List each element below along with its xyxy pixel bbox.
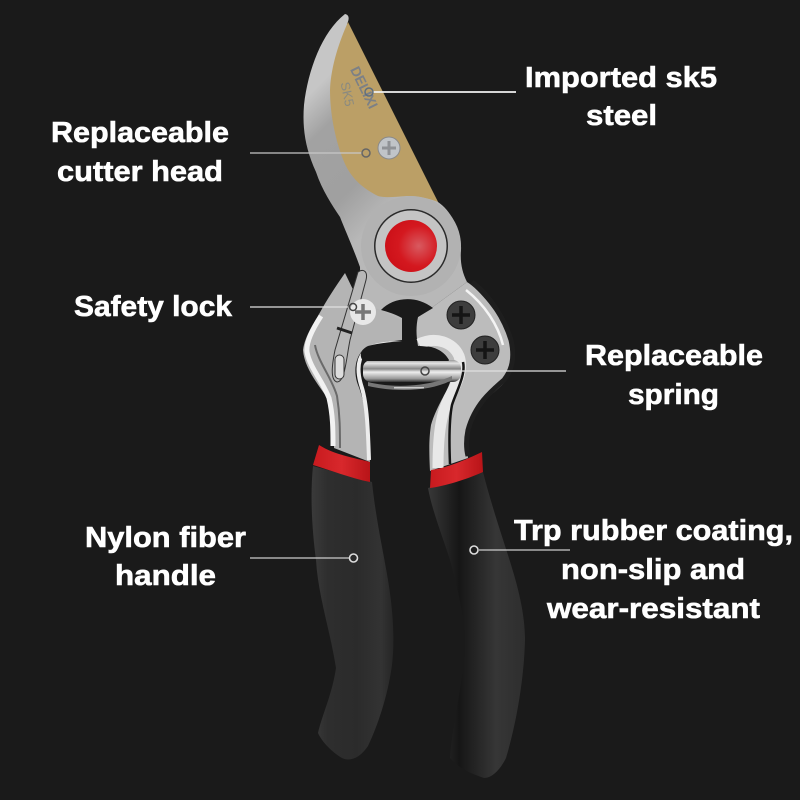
gold cutting edge (330, 22, 438, 202)
pivot hub (361, 196, 461, 296)
label: imported sk5 steel (525, 62, 717, 132)
label: replaceable spring (585, 340, 763, 411)
label: imported sk5 steel: Imported sk5 (525, 62, 717, 94)
leader line: rubber coating (470, 546, 570, 554)
right handle screws (447, 301, 499, 364)
label: trp rubber coating: wear-resistant (546, 593, 760, 625)
blade logo: DELIXI (347, 64, 381, 111)
label: replaceable cutter head (51, 117, 229, 188)
blade body (304, 14, 467, 320)
safety lock (332, 270, 376, 382)
blade screw (378, 137, 400, 159)
spring (363, 360, 461, 390)
label: imported sk5 steel: steel (586, 100, 657, 132)
label: safety lock: Safety lock (74, 291, 233, 323)
illustration: pruning shears (303, 14, 525, 778)
left handle silver (303, 273, 402, 462)
label: trp rubber coating: Trp rubber coating, (514, 515, 793, 547)
left rubber grip (312, 466, 393, 760)
right handle black divider (449, 362, 464, 464)
left red band (313, 445, 370, 482)
label: nylon fiber handle: Nylon fiber (85, 522, 246, 554)
right handle highlight (466, 290, 503, 345)
label: nylon fiber handle: handle (115, 560, 216, 592)
label: nylon fiber handle (85, 522, 246, 592)
label: replaceable spring: spring (628, 379, 719, 411)
right handle chrome tube (419, 340, 461, 468)
right handle dark outer edge (466, 282, 513, 456)
label: replaceable cutter head: Replaceable (51, 117, 229, 149)
right handle silver (416, 282, 514, 471)
right rubber grip (428, 472, 525, 778)
left handle chrome outer edge (307, 316, 333, 446)
leader line: cutter head (250, 149, 370, 157)
left handle inner chrome (358, 343, 402, 460)
leader line: spring (421, 367, 566, 375)
left handle dark accent (315, 345, 340, 448)
leader line: safety lock (250, 304, 356, 310)
jaw opening and window (361, 299, 449, 361)
leader line: imported steel (365, 88, 516, 96)
blade sk5 mark: SK5 (338, 80, 357, 108)
label: replaceable spring: Replaceable (585, 340, 763, 372)
label: trp rubber coating: non-slip and (561, 554, 745, 586)
leader line: nylon handle (250, 554, 358, 562)
right red band (430, 452, 483, 488)
label: replaceable cutter head: cutter head (57, 156, 223, 188)
label: trp rubber coating (514, 515, 793, 625)
